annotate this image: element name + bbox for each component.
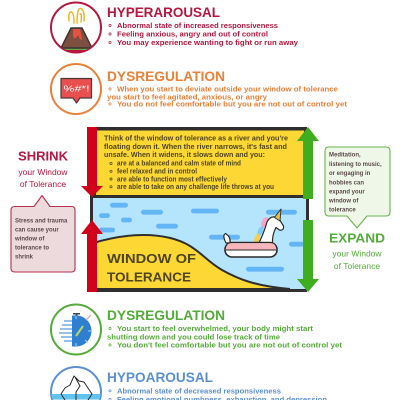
subheading: your Window [18, 167, 68, 177]
arrow: shrink from top [81, 127, 103, 197]
water [93, 197, 306, 290]
unicorn pool float [224, 209, 284, 257]
panel: shrink [11, 150, 75, 272]
panel: hypoarousal [50, 367, 327, 400]
bullet list: Abnormal state of increased responsiveness [117, 21, 278, 30]
callout: stress and trauma: can cause your [15, 228, 59, 234]
icon: swearing speech bubble [51, 64, 101, 114]
yellow explanation panel [92, 127, 307, 198]
bullet list: When you start to deviate outside your window of tolerance [117, 85, 338, 94]
subheading: your Window [332, 249, 382, 259]
subheading: of Tolerance [20, 179, 66, 189]
callout: meditation: Meditation, [329, 153, 361, 159]
label: window of tolerance: TOLERANCE [107, 270, 191, 284]
river bank [93, 235, 290, 289]
bullet list [109, 21, 299, 47]
callout: stress and trauma: Stress and trauma [15, 218, 68, 224]
subheading: of Tolerance [334, 261, 380, 271]
bullet list: You don't feel comfortable but you are not out of control yet [117, 340, 343, 350]
icon: swearing speech bubble: %#*! [64, 84, 90, 94]
callout: stress and trauma: shrink [15, 254, 34, 260]
heading: DYSREGULATION [107, 68, 225, 84]
yellow explanation panel: are able to function most effectively [117, 174, 228, 183]
callout: stress and trauma [11, 196, 75, 272]
callout: meditation: listening to music, [329, 162, 382, 168]
yellow explanation panel: are able to take on any challenge life throws at you [117, 182, 274, 191]
heading: HYPOAROUSAL [107, 369, 213, 385]
yellow explanation panel: are at a balanced and calm state of mind [117, 159, 241, 168]
heading: shrink: SHRINK [18, 150, 68, 164]
bullet list: Abnormal state of decreased responsiveness [117, 386, 281, 395]
heading: expand: EXPAND [329, 232, 385, 246]
bullet list [107, 85, 348, 109]
bullet list [107, 324, 343, 350]
river ripples [99, 203, 304, 272]
arrow: shrink from bottom [81, 220, 103, 292]
label: window of tolerance: WINDOW OF [107, 251, 196, 266]
arrow: expand upward [297, 127, 319, 199]
bullet list: You do not feel comfortable but you are not out of control yet [117, 100, 348, 109]
label: window of tolerance [107, 251, 196, 284]
callout: meditation: tolerance [329, 208, 356, 214]
bullet list: You may experience wanting to fight or run away [117, 38, 299, 47]
frame bottom [92, 289, 307, 292]
callout: meditation: window of [328, 198, 359, 204]
bullet list [109, 386, 327, 400]
panel: window of tolerance river diagram [81, 127, 319, 292]
yellow explanation panel: Think of the window of tolerance as a river and you're [104, 134, 288, 143]
heading: DYSREGULATION [107, 307, 225, 323]
yellow explanation panel: unsafe. When it widens, it slows down and you: [104, 150, 265, 159]
icon: volcano [50, 2, 102, 54]
yellow explanation panel: feel relaxed and in control [117, 166, 197, 176]
icon: stopwatch [51, 304, 101, 354]
callout: meditation: or engaging in [329, 171, 371, 177]
callout: meditation [325, 147, 390, 228]
callout: meditation: hobbies can [329, 180, 364, 186]
bullet list: Feeling anxious, angry and out of control [117, 30, 268, 38]
frame sides [90, 195, 309, 223]
bullet list: shutting down and you could lose track of time [107, 332, 280, 342]
icon: iceberg [50, 367, 102, 400]
panel: dysregulation lower [51, 304, 343, 354]
callout: meditation: expand your [329, 189, 365, 195]
yellow explanation panel: floating down it. When the river narrows, it's fast and [104, 142, 287, 151]
heading: HYPERAROUSAL [107, 4, 220, 20]
arrow: expand downward [297, 220, 319, 292]
panel: dysregulation upper [51, 64, 348, 114]
subheading [18, 167, 68, 189]
bullet list: You start to feel overwhelmed, your body might start [117, 324, 314, 333]
panel: expand [325, 147, 390, 271]
callout: stress and trauma: window of [14, 236, 45, 242]
subheading [332, 249, 382, 271]
panel: hyperarousal [50, 2, 299, 54]
bullet list: you start to feel agitated, anxious, or angry [107, 92, 268, 101]
callout: stress and trauma: tolerance to [15, 246, 49, 252]
